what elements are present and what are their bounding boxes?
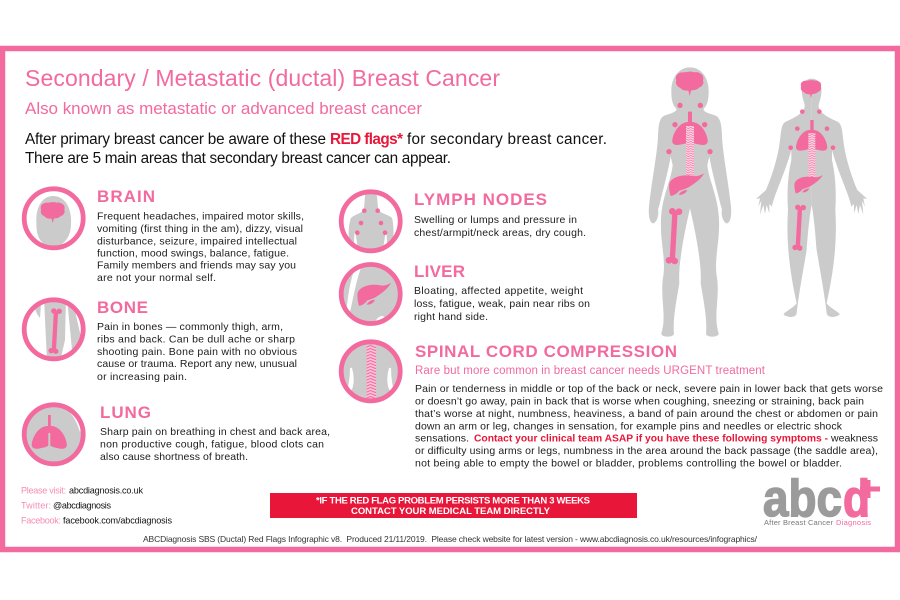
- contact links: Facebook:: [21, 516, 61, 526]
- text: lung symptoms: Sharp pain on breathing in chest and back area,: [100, 426, 330, 438]
- text: liver symptoms: right hand side.: [414, 311, 488, 323]
- logo: abcd: Diagnosis: [836, 518, 871, 527]
- text: liver symptoms: [414, 285, 590, 323]
- text: bone symptoms: or increasing pain.: [97, 371, 187, 383]
- logo: abcd: After Breast Cancer: [764, 518, 834, 527]
- heading: brain: BRAIN: [97, 187, 155, 206]
- icon: brain: [24, 189, 83, 250]
- title: Secondary / Metastatic (ductal) Breast Cancer: [25, 65, 500, 91]
- text: brain symptoms: are not your normal self.: [97, 272, 216, 284]
- text: brain symptoms: function, mood swings, balance, fatigue.: [97, 248, 289, 260]
- icon: lymph nodes: [341, 192, 400, 254]
- text: spinal cord compression symptoms: [415, 383, 883, 470]
- contact links: facebook.com/abcdiagnosis: [63, 516, 172, 526]
- subheading: urgent treatment: Rare but more common in breast cancer needs URGENT treatment: [415, 365, 766, 377]
- heading: liver: LIVER: [414, 262, 465, 281]
- text: lung symptoms: [100, 426, 330, 463]
- text: brain symptoms: Frequent headaches, impaired motor skills,: [97, 210, 304, 222]
- contact links: abcdiagnosis.co.uk: [69, 486, 143, 496]
- text: brain symptoms: [97, 210, 304, 284]
- contact links: Twitter:: [21, 500, 51, 510]
- text: lung symptoms: also cause shortness of breath.: [100, 451, 248, 463]
- text: spinal cord compression symptoms: down an arm or leg, changes in sensation, for example pins and needles or electric shock: [415, 420, 843, 432]
- text: bone symptoms: Pain in bones — commonly thigh, arm,: [97, 321, 283, 333]
- subtitle: Also known as metastatic or advanced breast cancer: [25, 99, 422, 118]
- heading: spinal cord compression: SPINAL CORD COMPRESSION: [415, 342, 677, 361]
- text: lymph nodes symptoms: [414, 214, 586, 239]
- icon: liver: [341, 264, 401, 326]
- text: bone symptoms: shooting pain. Bone pain with no obvious: [97, 346, 297, 358]
- heading: bone: BONE: [97, 298, 148, 317]
- intro text: There are 5 main areas that secondary breast cancer can appear.: [25, 150, 451, 167]
- text: brain symptoms: vomiting (first thing in the am), dizzy, visual: [97, 223, 303, 235]
- text: lung symptoms: non productive cough, fatigue, blood clots can: [100, 438, 324, 450]
- icon: spine: [341, 341, 401, 401]
- contact links: [21, 486, 172, 526]
- text: spinal cord compression symptoms: not being able to empty the bowel or bladder, problems controlling the bowel or bladder.: [415, 458, 842, 470]
- text: spinal cord compression symptoms: or doesn’t go away, pain in back that is worse when coughing, sneezing or straining, back pain: [415, 396, 864, 408]
- text: lymph nodes symptoms: Swelling or lumps and pressure in: [414, 214, 577, 226]
- callout: red flag warning: CONTACT YOUR MEDICAL TEAM DIRECTLY: [351, 506, 551, 517]
- text: spinal cord compression symptoms: weakness: [830, 433, 878, 445]
- icon: lung: [24, 402, 90, 464]
- intro text: for secondary breast cancer.: [407, 131, 607, 148]
- text: spinal cord compression symptoms: Contact your clinical team ASAP if you have these following symptoms -: [474, 434, 829, 445]
- text: spinal cord compression symptoms: Pain or tenderness in middle or top of the back or neck, severe pain in lower back that gets worse: [415, 383, 883, 395]
- heading: lymph nodes: LYMPH NODES: [414, 190, 547, 209]
- footer note: ABCDiagnosis SBS (Ductal) Red Flags Infographic v8. Produced 21/11/2019. Please check website for latest version - www.abcdiagnosis.co.uk/resources/infographics/: [143, 534, 758, 544]
- icon: bone: [24, 298, 84, 362]
- contact links: Please visit:: [21, 486, 66, 496]
- text: liver symptoms: Bloating, affected appetite, weight: [414, 285, 583, 297]
- intro text: RED flags*: [330, 131, 403, 148]
- text: liver symptoms: loss, fatigue, weak, pain near ribs on: [414, 298, 590, 310]
- heading: lung: LUNG: [100, 403, 151, 422]
- callout: red flag warning: [270, 493, 637, 518]
- contact links: @abcdiagnosis: [53, 500, 111, 510]
- text: bone symptoms: ribs and back. Can be dull ache or sharp: [97, 334, 295, 346]
- text: spinal cord compression symptoms: or difficulty using arms or legs, numbness in the area around the back passage (the saddle area),: [415, 445, 878, 457]
- logo: abcd: d: [843, 470, 870, 528]
- logo: abcd: abc: [763, 470, 842, 528]
- text: bone symptoms: cause or trauma. Report any new, unusual: [97, 358, 297, 370]
- text: brain symptoms: Family members and friends may say you: [97, 260, 296, 272]
- text: spinal cord compression symptoms: that’s worse at night, numbness, heaviness, a band of pain around the chest or abdomen or pain: [415, 408, 878, 420]
- intro text: After primary breast cancer be aware of these: [25, 131, 326, 148]
- text: bone symptoms: [97, 321, 297, 383]
- text: lymph nodes symptoms: chest/armpit/neck areas, dry cough.: [414, 227, 586, 239]
- text: spinal cord compression symptoms: sensations.: [415, 433, 469, 445]
- intro text: [25, 131, 607, 167]
- text: brain symptoms: disturbance, seizure, impaired intellectual: [97, 236, 297, 248]
- callout: red flag warning: *IF THE RED FLAG PROBLEM PERSISTS MORE THAN 3 WEEKS: [316, 496, 590, 506]
- figure: female body with affected areas: [649, 67, 731, 337]
- figure: male body with affected areas: [756, 79, 867, 317]
